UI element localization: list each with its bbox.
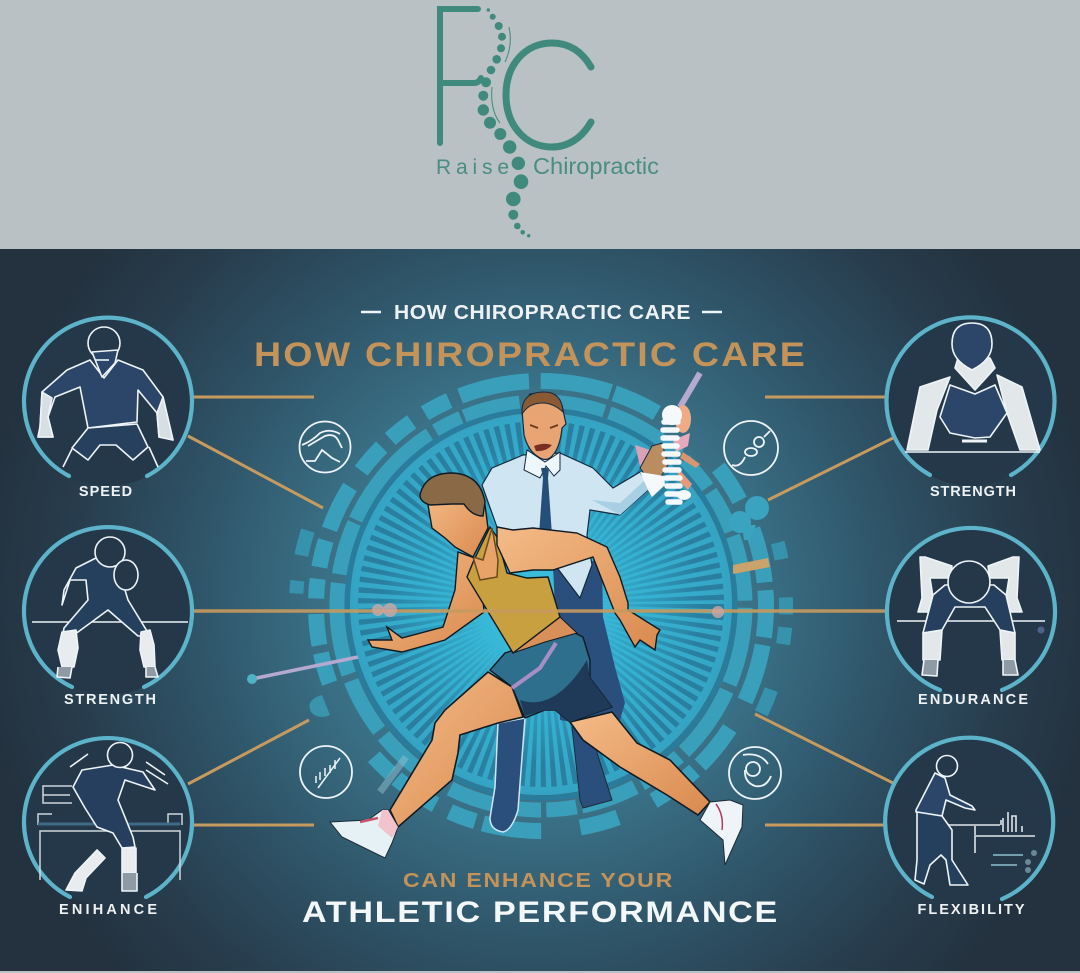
spine vertebrae	[663, 422, 680, 502]
decorative disc accents	[247, 496, 770, 792]
runner figure	[330, 473, 743, 865]
doctor hair	[522, 392, 563, 414]
athlete	[38, 327, 173, 467]
orange block	[733, 558, 770, 574]
runner back leg	[570, 712, 710, 815]
doctor tie	[539, 468, 552, 535]
doctor head	[522, 394, 566, 460]
small round icon: vertebra column left	[300, 746, 352, 798]
doctor figure	[482, 392, 650, 832]
runner hair	[420, 473, 485, 516]
doctor hand	[640, 443, 668, 478]
athlete	[905, 323, 1040, 452]
shorts stripes	[512, 643, 556, 688]
heading line one: HOW CHIROPRACTIC CARE	[394, 302, 691, 324]
logo: Raise Chiropractic	[436, 8, 659, 237]
label: SPEED	[79, 484, 133, 500]
athlete circle: strength left	[24, 527, 192, 708]
athlete circle: strength right	[886, 317, 1055, 500]
label: FLEXIBILITY	[918, 902, 1025, 918]
athlete circle: flexibility	[885, 738, 1055, 918]
runner shorts	[490, 632, 612, 722]
floor line	[32, 621, 188, 623]
heading line two: HOW CHIROPRACTIC CARE	[254, 336, 807, 374]
circle frame	[886, 317, 1055, 486]
athlete	[66, 742, 168, 891]
runner chest neckline	[473, 528, 498, 580]
logo wordmark Raise: Raise	[436, 156, 509, 179]
accent dot	[1038, 626, 1044, 634]
doctor mouth	[534, 444, 552, 451]
circle frame	[887, 528, 1055, 696]
connector lines	[188, 397, 893, 825]
spine model	[635, 373, 700, 502]
faint streak	[380, 757, 406, 792]
spine top and bottom caps	[662, 405, 682, 425]
circle frame	[885, 738, 1055, 906]
spine tissue accents	[635, 405, 700, 490]
small round icon: spine vertebrae right	[724, 421, 778, 475]
logo band background	[0, 0, 1080, 249]
circle frame	[24, 738, 192, 906]
doctor trousers	[553, 560, 625, 725]
athlete circle: endurance	[887, 528, 1055, 708]
runner shoulder and right arm	[497, 527, 660, 650]
runner left arm	[368, 552, 484, 652]
label: STRENGTH	[64, 692, 156, 708]
blob left of disc	[309, 695, 330, 717]
label: ENDURANCE	[918, 692, 1028, 708]
label: STRENGTH	[930, 484, 1016, 500]
runner front shoe	[330, 810, 398, 858]
athlete circle: speed	[24, 318, 192, 500]
connector nodes	[372, 604, 384, 616]
runner head	[428, 490, 488, 557]
doctor collar	[524, 450, 560, 478]
radial spokes	[419, 482, 663, 726]
equipment frames	[38, 786, 182, 880]
equipment bench	[945, 812, 1037, 873]
subheading: CAN ENHANCE YOUR	[403, 870, 674, 892]
doctor shirt	[482, 453, 650, 598]
runner rear shoe	[700, 800, 743, 865]
logo wordmark Chiropractic: Chiropractic	[533, 153, 659, 179]
blob right of disc	[729, 496, 769, 540]
spine pointer	[680, 373, 700, 407]
floor line	[897, 620, 1045, 622]
runner front leg	[390, 672, 523, 827]
logo letter P	[440, 9, 481, 143]
label: ENIHANCE	[59, 902, 157, 918]
circle frame	[24, 318, 192, 486]
horizontal connector line across disc	[193, 603, 885, 618]
doctor legs	[490, 718, 525, 832]
disc rim ring	[347, 410, 735, 798]
runner tank top	[467, 527, 560, 653]
doctor cuff	[640, 472, 665, 497]
athlete	[918, 557, 1022, 676]
circle frame	[24, 527, 192, 695]
small round icon: muscle wave	[300, 422, 350, 472]
logo letter C	[506, 43, 591, 147]
bottom edge strip	[0, 971, 1080, 973]
athlete	[57, 537, 158, 678]
small round icon: nerve knot right	[729, 747, 781, 799]
purple pointer with dot	[252, 657, 358, 679]
closing heading: ATHLETIC PERFORMANCE	[302, 896, 779, 929]
athlete circle: enhance	[24, 738, 192, 918]
central segmented disc	[296, 361, 786, 851]
infographic panel background	[0, 249, 1080, 971]
inner glowing disc	[350, 413, 732, 795]
athlete	[915, 756, 975, 885]
logo spine dots	[478, 8, 530, 237]
runner waist skin	[513, 617, 577, 653]
ring segments	[296, 361, 786, 851]
